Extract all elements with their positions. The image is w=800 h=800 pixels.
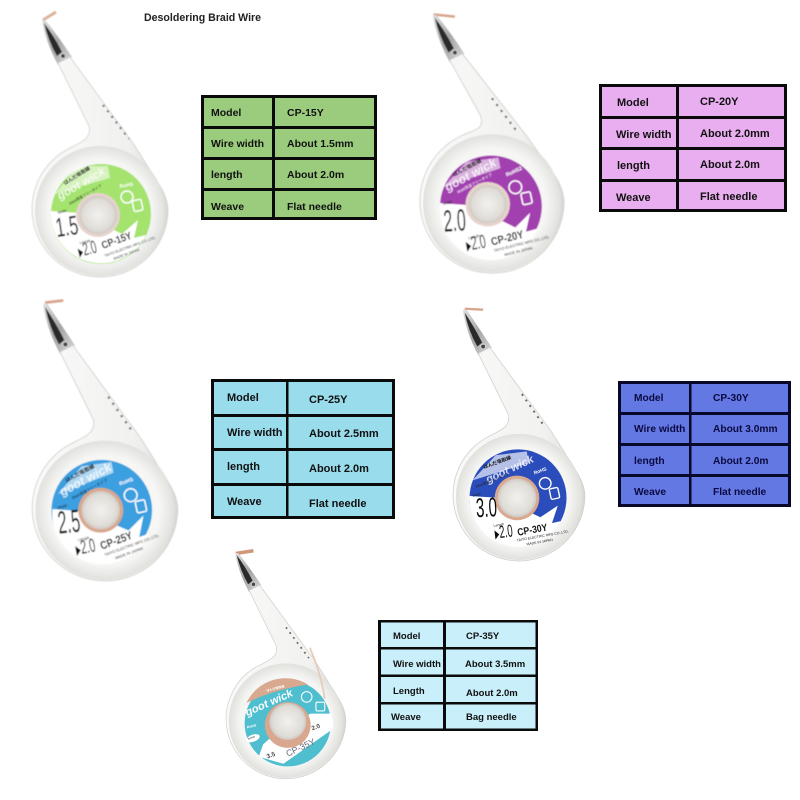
icon: CP-25Y blue solder wick spool: RoHS: [119, 477, 135, 487]
icon: CP-35Y teal solder wick spool: goot wick: [243, 687, 296, 719]
icon: CP-15Y green solder wick spool: RMA残渣フリータイプ: [68, 183, 103, 206]
icon: CP-35Y teal solder wick spool: RoHS: [247, 723, 257, 730]
spec table: CP-25Y: Model: [227, 392, 259, 404]
spec table: CP-30Y: Model: [634, 393, 664, 404]
icon: CP-25Y blue solder wick spool: MADE IN JAPAN: [115, 547, 144, 560]
icon: CP-15Y green solder wick spool: Width: [57, 209, 67, 215]
icon: CP-15Y green solder wick spool: RoHS: [119, 182, 134, 190]
icon: CP-20Y purple solder wick spool: Length: [468, 234, 480, 240]
spec table: CP-35Y: About 3.5mm: [465, 659, 525, 670]
icon: CP-20Y purple solder wick spool: ▶2.0: [464, 231, 488, 256]
icon: CP-30Y indigo solder wick spool: Width: [472, 492, 481, 498]
icon: CP-20Y purple solder wick spool: [420, 15, 564, 273]
spec table: CP-15Y: length: [211, 169, 242, 181]
spec table: CP-20Y: [599, 84, 787, 212]
spec table: CP-20Y: Flat needle: [700, 191, 757, 203]
icon: CP-20Y purple solder wick spool: MADE IN JAPAN: [504, 246, 533, 257]
spec table: CP-25Y: Weave: [227, 496, 262, 508]
spec table: CP-35Y: CP-35Y: [466, 631, 500, 642]
icon: CP-15Y green solder wick spool: [32, 12, 168, 277]
icon: CP-15Y green solder wick spool: MADE IN JAPAN: [113, 248, 140, 261]
spec table: CP-15Y: [201, 95, 377, 220]
panel: CP-35Y: [226, 551, 538, 779]
icon: CP-15Y green solder wick spool: はんだ吸取線: [62, 165, 92, 187]
spec table: CP-25Y: Flat needle: [309, 498, 366, 510]
icon: CP-15Y green solder wick spool: TAIYO ELECTRIC MFG CO.,LTD.: [104, 236, 156, 258]
spec table: CP-30Y: Flat needle: [713, 487, 767, 498]
spec table: CP-35Y: [378, 620, 538, 731]
spec table: CP-15Y: About 2.0m: [287, 169, 344, 181]
spec table: CP-20Y: length: [617, 160, 650, 172]
spec table: CP-35Y: Model: [393, 631, 420, 642]
spec table: CP-20Y: About 2.0mm: [700, 128, 770, 140]
icon: CP-20Y purple solder wick spool: RMA残渣フリータイプ: [456, 172, 493, 195]
spec table: CP-35Y: Weave: [391, 712, 421, 723]
title: Desoldering Braid Wire: [144, 12, 261, 24]
icon: CP-25Y blue solder wick spool: Length: [78, 536, 90, 542]
icon: CP-35Y teal solder wick spool: 2.0: [311, 722, 322, 732]
spec table: CP-30Y: Weave: [634, 487, 666, 498]
spec table: CP-30Y: Wire width: [634, 424, 685, 435]
icon: CP-25Y blue solder wick spool: 2.5: [56, 504, 82, 541]
icon: CP-15Y green solder wick spool: Length: [79, 239, 91, 245]
spec table: CP-20Y: Wire width: [616, 129, 672, 141]
icon: CP-30Y indigo solder wick spool: MADE IN JAPAN: [526, 538, 553, 546]
icon: CP-15Y green solder wick spool: goot wick: [55, 165, 108, 203]
icon: CP-25Y blue solder wick spool: ▶2.0: [73, 535, 98, 560]
panel: CP-15Y: [32, 12, 377, 277]
spec table: CP-35Y: Bag needle: [466, 712, 517, 723]
icon: CP-35Y teal solder wick spool: [226, 551, 346, 779]
spec table: CP-35Y: About 2.0m: [466, 688, 518, 699]
spec table: CP-15Y: Weave: [211, 201, 244, 213]
icon: CP-35Y teal solder wick spool: ROHS: [247, 735, 256, 741]
icon: CP-15Y green solder wick spool: ▶2.0: [75, 238, 99, 262]
spec table: CP-25Y: [211, 379, 395, 519]
icon: CP-30Y indigo solder wick spool: RoHS: [533, 466, 548, 476]
icon: CP-30Y indigo solder wick spool: Length: [493, 522, 505, 528]
icon: CP-25Y blue solder wick spool: goot wick: [56, 459, 115, 499]
spec table: CP-35Y: Wire width: [393, 659, 441, 670]
icon: CP-20Y purple solder wick spool: 2.0: [442, 204, 467, 239]
icon: CP-20Y purple solder wick spool: goot wick: [441, 155, 500, 195]
spec table: CP-20Y: Model: [617, 97, 649, 109]
panel: CP-20Y: [420, 15, 787, 273]
spec table: CP-25Y: CP-25Y: [309, 394, 348, 406]
icon: CP-30Y indigo solder wick spool: [453, 309, 585, 561]
spec table: CP-30Y: About 3.0mm: [713, 424, 778, 435]
spec table: CP-30Y: [618, 381, 791, 507]
icon: CP-20Y purple solder wick spool: Width: [442, 200, 453, 206]
icon: CP-20Y purple solder wick spool: RoHS2: [505, 166, 523, 178]
panel: CP-25Y: [32, 300, 395, 581]
icon: CP-25Y blue solder wick spool: TAIYO ELECTRIC MFG CO.,LTD.: [104, 534, 160, 557]
spec table: CP-25Y: About 2.5mm: [309, 428, 379, 440]
panel: CP-30Y: [453, 309, 791, 561]
spec table: CP-15Y: Model: [211, 107, 241, 119]
icon: CP-20Y purple solder wick spool: はんだ吸取線: [451, 156, 483, 178]
icon: CP-30Y indigo solder wick spool: goot wick: [483, 453, 537, 486]
icon: CP-35Y teal solder wick spool: CP-35Y: [284, 736, 317, 759]
icon: CP-35Y teal solder wick spool: はんだ吸取線: [266, 683, 286, 693]
icon: CP-25Y blue solder wick spool: CP-25Y: [99, 530, 134, 553]
spec table: CP-15Y: Wire width: [211, 138, 264, 150]
spec table: CP-15Y: Flat needle: [287, 201, 342, 213]
icon: CP-35Y teal solder wick spool: 3.5: [266, 751, 277, 760]
spec table: CP-25Y: Wire width: [227, 427, 283, 439]
icon: CP-30Y indigo solder wick spool: ▶2.0: [493, 520, 514, 542]
spec table: CP-15Y: CP-15Y: [287, 107, 324, 119]
spec table: CP-25Y: About 2.0m: [309, 463, 369, 475]
icon: CP-25Y blue solder wick spool: RMA残渣フリータイプ: [71, 477, 108, 500]
icon: CP-25Y blue solder wick spool: はんだ吸取線: [64, 462, 96, 484]
icon: CP-25Y blue solder wick spool: Width: [57, 504, 68, 510]
spec table: CP-20Y: Weave: [616, 192, 651, 204]
icon: CP-30Y indigo solder wick spool: CP-30Y: [517, 522, 549, 539]
icon: CP-20Y purple solder wick spool: CP-20Y: [490, 229, 525, 249]
icon: CP-15Y green solder wick spool: CP-15Y: [100, 230, 134, 252]
spec table: CP-30Y: About 2.0m: [713, 456, 768, 467]
icon: CP-25Y blue solder wick spool: [32, 300, 178, 581]
spec table: CP-15Y: About 1.5mm: [287, 138, 354, 150]
icon: CP-30Y indigo solder wick spool: TAIYO ELECTRIC MFG CO.,LTD.: [517, 529, 569, 543]
icon: CP-30Y indigo solder wick spool: はんだ吸取線: [482, 454, 512, 471]
icon: CP-15Y green solder wick spool: 1.5: [54, 210, 80, 243]
spec table: CP-30Y: CP-30Y: [713, 393, 749, 404]
icon: CP-20Y purple solder wick spool: TAIYO ELECTRIC MFG CO.,LTD.: [493, 235, 550, 253]
spec table: CP-25Y: length: [227, 461, 260, 473]
spec table: CP-20Y: About 2.0m: [700, 159, 760, 171]
spec table: CP-30Y: length: [634, 456, 665, 467]
icon: CP-30Y indigo solder wick spool: RMA残渣フリータイプ: [475, 471, 510, 489]
spec table: CP-35Y: Length: [393, 686, 425, 697]
icon: CP-30Y indigo solder wick spool: 3.0: [475, 492, 498, 523]
spec table: CP-20Y: CP-20Y: [700, 96, 739, 108]
